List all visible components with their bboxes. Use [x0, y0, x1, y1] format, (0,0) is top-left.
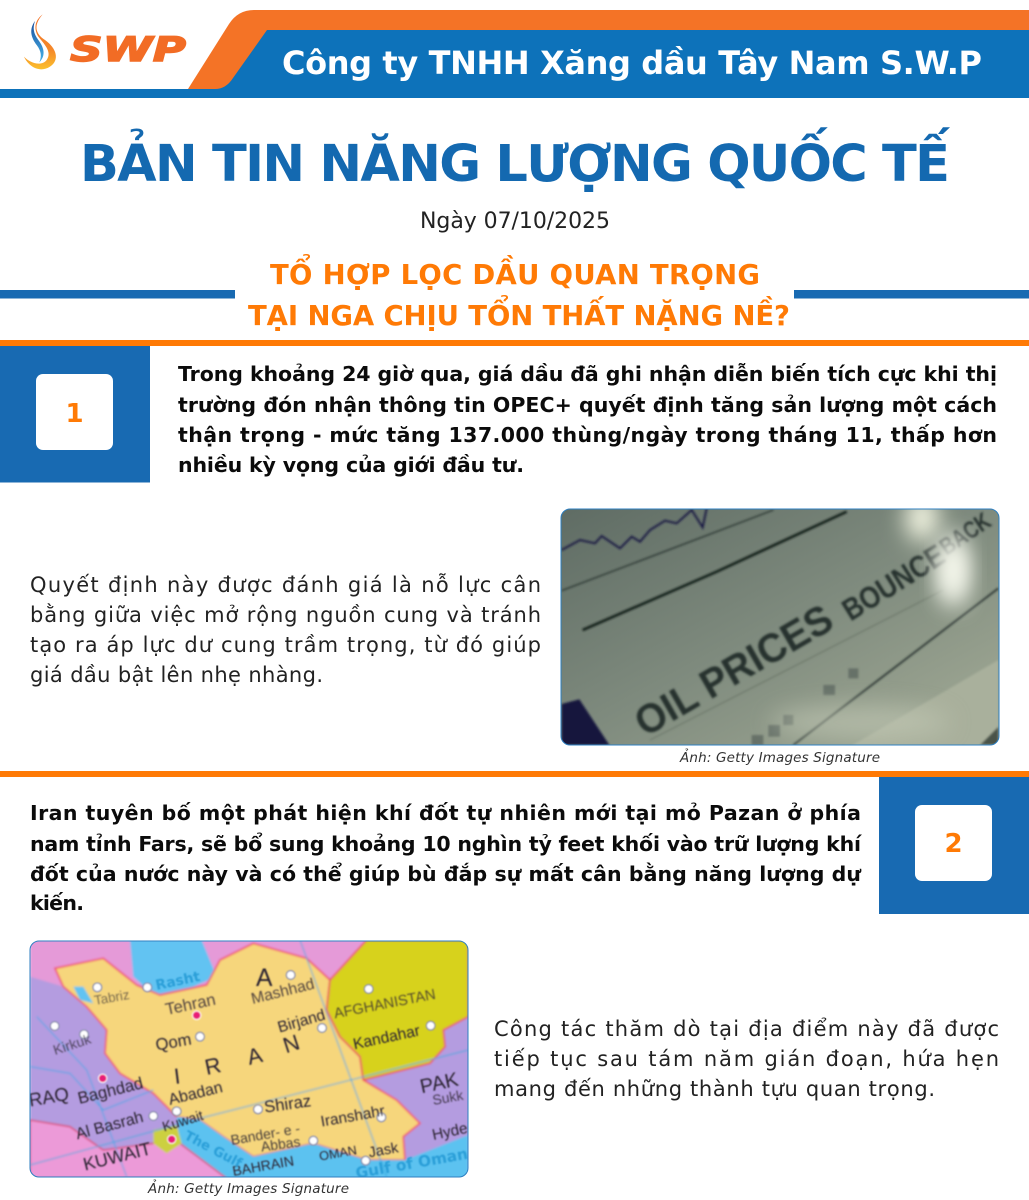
photo: map of Iran: Shiraz: [263, 1091, 312, 1117]
photo: map of Iran: Iranshahr: [319, 1103, 386, 1131]
photo: map of Iran: [27, 940, 470, 1182]
photo: map of Iran: Abadan: [167, 1079, 224, 1109]
photo: map of Iran: OMAN: [318, 1143, 358, 1164]
text block: paragraph 2: mang đến những thành tựu quan trọng.: [494, 1077, 935, 1101]
photo: map of Iran: The Gulf: [181, 1129, 244, 1172]
photo: map of Iran: RAQ: [27, 1083, 71, 1111]
photo: map of Iran: PAK: [418, 1069, 461, 1098]
logo: SWP: [24, 14, 186, 70]
photo: map of Iran: N: [280, 1029, 303, 1058]
caption 1: Ảnh: Getty Images Signature: [679, 748, 880, 766]
photo: map of Iran: Qom: [154, 1030, 193, 1055]
photo: map of Iran: Gulf of Oman: [354, 1145, 469, 1182]
text block: lead 2: [30, 801, 862, 915]
panel: item 1: [0, 346, 997, 482]
text block: lead 2: kiến.: [30, 891, 84, 915]
photo: map of Iran: Jask: [367, 1140, 400, 1161]
number badge 2: [879, 777, 1029, 914]
photo: map of Iran: A: [244, 1042, 265, 1070]
panel: item 2: [30, 777, 1029, 915]
title: BẢN TIN NĂNG LƯỢNG QUỐC TẾ: [80, 126, 950, 194]
photo: oil prices bounce back: OIL PRICES: [627, 596, 841, 745]
heading: TỔ HỢP LỌC DẦU QUAN TRỌNG: [270, 251, 760, 291]
heading: [0, 251, 1029, 332]
photo: oil prices bounce back: [561, 494, 999, 747]
text block: lead 1: nhiều kỳ vọng của giới đầu tư.: [178, 453, 524, 477]
number badge 2: 2: [944, 829, 963, 859]
photo: map of Iran: BAHRAIN: [231, 1152, 295, 1179]
photo: map of Iran: AFGHANISTAN: [333, 987, 437, 1022]
header banner: [0, 10, 1029, 98]
text block: paragraph 2: Công tác thăm dò tại địa điểm này đã được: [494, 1017, 999, 1041]
caption 2: Ảnh: Getty Images Signature: [147, 1179, 349, 1197]
photo: map of Iran: Al Basrah: [74, 1109, 145, 1143]
date: Ngày 07/10/2025: [420, 209, 610, 234]
text block: lead 2: nam tỉnh Fars, sẽ bổ sung khoảng 10 nghìn tỷ feet khối vào trữ lượng khí: [30, 831, 862, 856]
photo: map of Iran: Mashhad: [250, 976, 316, 1008]
text block: paragraph 1: bằng giữa việc mở rộng nguồn cung và tránh: [30, 603, 541, 627]
photo: oil prices bounce back: BOUNCE: [836, 538, 952, 628]
photo: oil prices bounce back: BACK: [934, 507, 996, 561]
photo: map of Iran: Tabriz: [93, 987, 131, 1008]
text block: lead 1: [178, 361, 997, 477]
photo: map of Iran: Hyde: [431, 1120, 469, 1144]
text block: paragraph 1: [30, 572, 541, 687]
logo: SWP: SWP: [70, 30, 186, 70]
text block: lead 1: Trong khoảng 24 giờ qua, giá dầu đã ghi nhận diễn biến tích cực khi thị: [178, 361, 997, 386]
text block: paragraph 1: Quyết định này được đánh giá là nỗ lực cân: [30, 572, 541, 597]
text block: lead 2: Iran tuyên bố một phát hiện khí đốt tự nhiên mới tại mỏ Pazan ở phía: [30, 801, 861, 825]
photo: map of Iran: R: [203, 1052, 223, 1080]
text block: lead 1: thận trọng - mức tăng 137.000 thùng/ngày trong tháng 11, thấp hơn: [178, 423, 997, 447]
photo: map of Iran: Kirkuk: [51, 1030, 94, 1058]
text block: paragraph 2: tiếp tục sau tám năm gián đoạn, hứa hẹn: [494, 1047, 999, 1071]
icon: flame: [24, 14, 56, 69]
number badge 1: 1: [65, 399, 84, 429]
heading: TẠI NGA CHỊU TỔN THẤT NẶNG NỀ?: [248, 292, 790, 332]
photo: map of Iran: KUWAIT: [81, 1138, 153, 1175]
text block: lead 1: trường đón nhận thông tin OPEC+ quyết định tăng sản lượng một cách: [178, 393, 997, 417]
photo: map of Iran: Kandahar: [352, 1022, 422, 1053]
text block: paragraph 1: giá dầu bật lên nhẹ nhàng.: [30, 663, 323, 687]
photo: map of Iran: Rasht: [154, 969, 202, 994]
text block: lead 2: đốt của nước này và có thể giúp bù đắp sự mất cân bằng năng lượng dự: [30, 861, 862, 886]
photo: map of Iran: A: [256, 965, 273, 992]
photo: map of Iran: Birjand: [276, 1007, 327, 1037]
photo: map of Iran: Baghdad: [76, 1073, 145, 1108]
photo: map of Iran: Abbas: [260, 1133, 301, 1155]
photo: map of Iran: Kuwait: [160, 1107, 205, 1135]
header title: Công ty TNHH Xăng dầu Tây Nam S.W.P: [282, 44, 982, 82]
text block: paragraph 2: [494, 1017, 999, 1101]
text block: paragraph 1: tạo ra áp lực dư cung trầm trọng, từ đó giúp: [30, 633, 541, 657]
number badge 1: [0, 346, 150, 482]
photo: map of Iran: Bander- e -: [229, 1120, 301, 1148]
photo: map of Iran: Sukk: [431, 1087, 465, 1108]
photo: map of Iran: I: [173, 1063, 182, 1089]
photo: map of Iran: Tehran: [164, 990, 217, 1019]
